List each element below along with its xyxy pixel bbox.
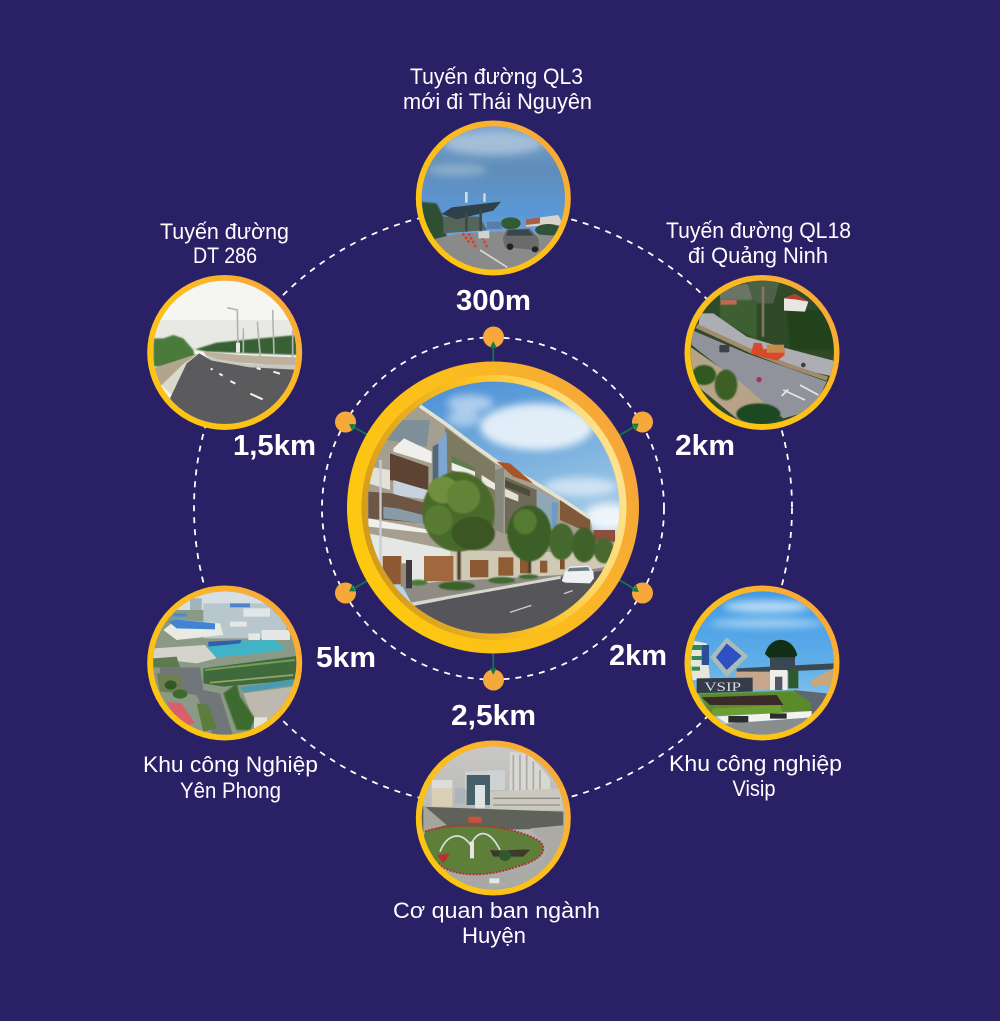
node: district government offices bbox=[419, 744, 568, 892]
distance: 2km right top: 2km bbox=[675, 430, 735, 462]
label: DT 286: DT 286 bbox=[193, 243, 257, 268]
centre project photo with gold ring bbox=[347, 362, 639, 654]
label: DT 286 bbox=[160, 219, 289, 268]
node: Visip industrial park bbox=[687, 588, 840, 738]
label: Visip: Khu công nghiệp bbox=[669, 751, 842, 776]
outer dashed orbit bbox=[194, 209, 792, 807]
distance: 2km right bottom: 2km bbox=[609, 640, 667, 672]
label: QL3: mới đi Thái Nguyên bbox=[403, 89, 592, 114]
node: Yen Phong industrial park bbox=[150, 588, 300, 738]
label: government offices: Cơ quan ban ngành bbox=[393, 898, 600, 923]
distance: 5km: 5km bbox=[316, 642, 376, 674]
distance: 1,5km: 1,5km bbox=[233, 430, 316, 462]
node: DT 286 road bbox=[150, 277, 300, 427]
label: government offices bbox=[393, 898, 600, 948]
distance: 300m: 300m bbox=[456, 285, 531, 317]
label: QL18 bbox=[666, 218, 851, 268]
infographic: location map bbox=[144, 66, 850, 948]
inner dashed orbit bbox=[322, 338, 664, 680]
label: government offices: Huyện bbox=[462, 923, 526, 948]
connector dots and arrows bbox=[335, 326, 653, 690]
label: QL18: đi Quảng Ninh bbox=[688, 243, 828, 268]
pavement and road bbox=[402, 567, 613, 603]
label: QL3 bbox=[403, 64, 592, 114]
node: QL18 road bbox=[687, 277, 840, 430]
label: Yen Phong: Khu công Nghiệp bbox=[143, 752, 318, 777]
label: Yen Phong: Yên Phong bbox=[180, 778, 281, 803]
building bbox=[367, 406, 617, 583]
label: QL18: Tuyến đường QL18 bbox=[666, 218, 851, 243]
label: DT 286: Tuyến đường bbox=[160, 219, 289, 244]
node: QL3 road bbox=[419, 123, 568, 273]
node: Visip industrial park: VSIP bbox=[704, 680, 741, 694]
label: Yen Phong bbox=[143, 752, 318, 803]
label: Visip bbox=[669, 751, 842, 801]
label: Visip: Visip bbox=[732, 776, 776, 801]
label: QL3: Tuyến đường QL3 bbox=[410, 64, 583, 89]
trees bbox=[422, 472, 614, 580]
distance: 2,5km: 2,5km bbox=[451, 700, 536, 732]
